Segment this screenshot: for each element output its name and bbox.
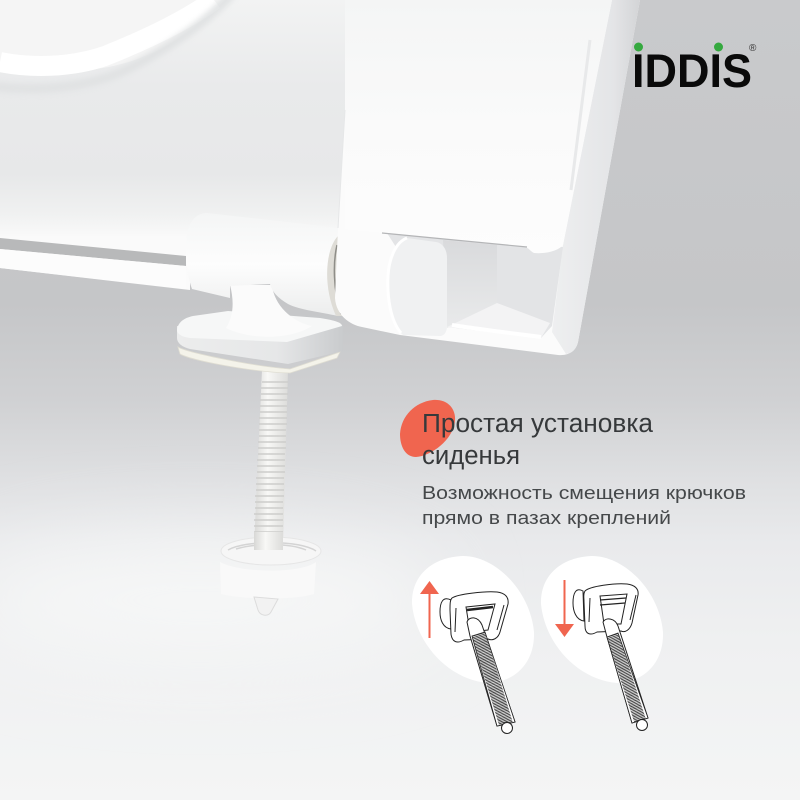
slot floor bbox=[447, 303, 550, 338]
bolt tip bbox=[254, 597, 278, 615]
heading: Простая установка bbox=[422, 410, 654, 438]
bearing ring bbox=[327, 236, 346, 316]
description text: Возможность смещения крючков bbox=[422, 482, 746, 503]
logo: IDDIS: IDDIS bbox=[632, 44, 752, 97]
horizontal cylinder bbox=[186, 213, 340, 316]
diagram: move down bbox=[541, 556, 663, 730]
seat lid and hinge housing bbox=[335, 0, 640, 355]
threaded rod bbox=[603, 619, 648, 723]
lid panel bbox=[345, 0, 612, 253]
description text bbox=[422, 482, 746, 528]
top washer bbox=[221, 537, 321, 565]
outer rim bbox=[335, 0, 640, 355]
down arrow bbox=[555, 580, 574, 637]
gasket bbox=[178, 347, 340, 373]
slot side wall bbox=[443, 240, 497, 328]
mounting bolt bbox=[220, 370, 321, 615]
up arrow bbox=[420, 581, 439, 638]
logo green dots bbox=[634, 42, 723, 52]
nut bbox=[220, 562, 316, 598]
rod shadow groove bbox=[0, 238, 186, 266]
seat body bbox=[0, 0, 352, 290]
registered mark: ® bbox=[749, 43, 757, 54]
seat ring opening bbox=[0, 0, 222, 70]
heading bbox=[422, 410, 654, 470]
hinge roller bbox=[388, 238, 447, 336]
toilet seat underside bbox=[0, 0, 352, 290]
heading: сиденья bbox=[422, 442, 520, 470]
plate side bbox=[177, 325, 343, 364]
right rim shading bbox=[552, 0, 640, 354]
plate top bbox=[177, 311, 342, 342]
description text: прямо в пазах креплений bbox=[422, 507, 671, 528]
bracket bbox=[573, 584, 638, 634]
bracket bbox=[440, 592, 508, 642]
white circle backdrop bbox=[541, 556, 663, 683]
elbow stem bbox=[226, 285, 312, 337]
accent blob bbox=[400, 400, 455, 457]
threaded rod bbox=[467, 618, 515, 726]
hinge clamp bbox=[177, 213, 346, 373]
diagram: move up bbox=[412, 556, 534, 734]
white circle backdrop bbox=[412, 556, 534, 683]
threaded shank bbox=[254, 370, 288, 548]
slot recess back bbox=[387, 233, 563, 338]
